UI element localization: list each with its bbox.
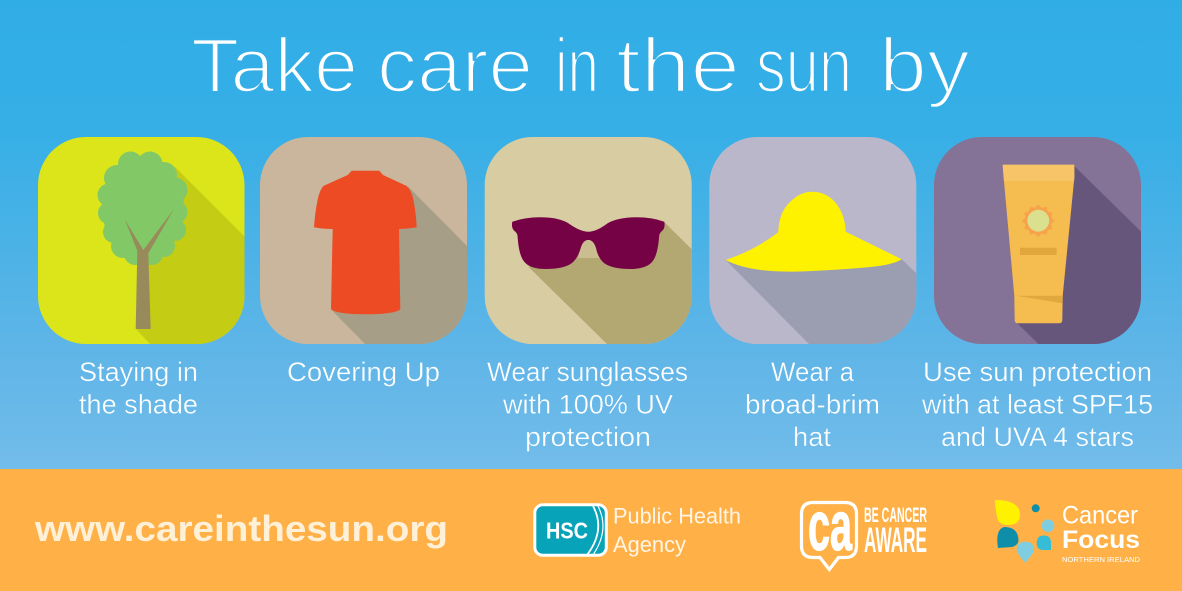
icon: t-shirt	[314, 171, 417, 314]
tube cap band	[1003, 165, 1074, 181]
sky background	[0, 0, 1182, 469]
caption: sunglasses: protection	[525, 422, 651, 452]
caption: staying in the shade: the shade	[79, 390, 198, 420]
caption: hat	[745, 357, 880, 452]
yellow petal	[995, 500, 1020, 525]
title: Take	[191, 23, 358, 109]
tile background: tan	[260, 137, 467, 344]
light blue dot	[1042, 519, 1054, 532]
icon: sunscreen tube	[1003, 165, 1074, 323]
caption: sunglasses: with 100% UV	[502, 390, 673, 420]
caption: sun protection: and UVA 4 stars	[941, 422, 1134, 452]
tree crown	[98, 152, 188, 265]
cancer focus words	[1062, 502, 1141, 564]
text: AWARE	[864, 521, 927, 560]
title: sun	[756, 23, 852, 109]
HSC arcs	[587, 506, 603, 555]
agency name	[613, 504, 741, 557]
speech bubble	[802, 502, 856, 570]
logo: HSC Public Health Agency	[535, 504, 741, 557]
tree shadow	[136, 167, 245, 345]
HSC text: HSC	[546, 518, 588, 544]
cyan drop	[1037, 536, 1051, 550]
panel: wear a hat	[709, 137, 918, 345]
tube body	[1003, 165, 1074, 323]
caption: covering up: Covering Up	[287, 357, 440, 387]
title	[191, 23, 971, 109]
hat shadow	[726, 259, 918, 345]
light blue drop	[1017, 542, 1034, 563]
shirt shadow	[332, 187, 468, 345]
agency name: Public Health	[613, 504, 741, 528]
cancer focus words: Focus	[1062, 526, 1140, 554]
website url: www.careinthesun.org	[34, 508, 448, 549]
caption: sun protection: with at least SPF15	[921, 390, 1153, 420]
be cancer aware words	[864, 504, 927, 560]
cancer focus words: NORTHERN IRELAND	[1062, 555, 1141, 564]
caption: hat: Wear a	[771, 357, 855, 387]
tile background: lilac	[709, 137, 916, 344]
ca letters: ca	[808, 487, 853, 565]
panel: staying in the shade	[38, 137, 245, 345]
icon: tree	[98, 152, 188, 329]
label bar	[1020, 248, 1057, 255]
tree trunk	[125, 209, 174, 329]
footer band	[0, 469, 1182, 591]
title: by	[879, 23, 971, 109]
caption: staying in the shade	[79, 357, 198, 420]
tile background: purple	[934, 137, 1141, 344]
HSC badge	[535, 505, 606, 555]
logo: Be Cancer Aware	[802, 487, 927, 570]
small teal dot	[1032, 504, 1040, 512]
caption: sun protection: Use sun protection	[923, 357, 1152, 387]
sun disc	[1027, 210, 1049, 232]
tile background: lime	[38, 137, 244, 344]
title: in	[555, 23, 599, 109]
agency name: Agency	[613, 532, 686, 557]
logo: Cancer Focus Northern Ireland	[995, 500, 1141, 564]
tile background: sand	[485, 137, 692, 344]
icon: sunglasses	[512, 217, 665, 269]
sunglasses shadow	[528, 222, 693, 345]
caption: hat: hat	[793, 422, 831, 452]
sun rays	[1022, 204, 1055, 237]
panel: covering up	[260, 137, 468, 345]
panel: use sun protection	[934, 137, 1142, 345]
caption: hat: broad-brim	[745, 390, 880, 420]
tube shadow	[1017, 166, 1142, 345]
nose gap	[578, 241, 600, 258]
title: the	[616, 23, 740, 109]
cancer focus words: Cancer	[1062, 502, 1138, 530]
caption: staying in the shade: Staying in	[79, 357, 198, 387]
caption: sun protection	[921, 357, 1153, 452]
panel: wear sunglasses	[485, 137, 693, 345]
tube crimp	[1016, 296, 1063, 303]
caption: sunglasses	[487, 357, 688, 452]
dark teal petal	[997, 527, 1018, 548]
be cancer aware words: BE CANCER	[864, 504, 927, 527]
title: care	[377, 23, 533, 109]
icon: broad-brim hat	[726, 192, 902, 272]
caption: sunglasses: Wear sunglasses	[487, 357, 688, 387]
